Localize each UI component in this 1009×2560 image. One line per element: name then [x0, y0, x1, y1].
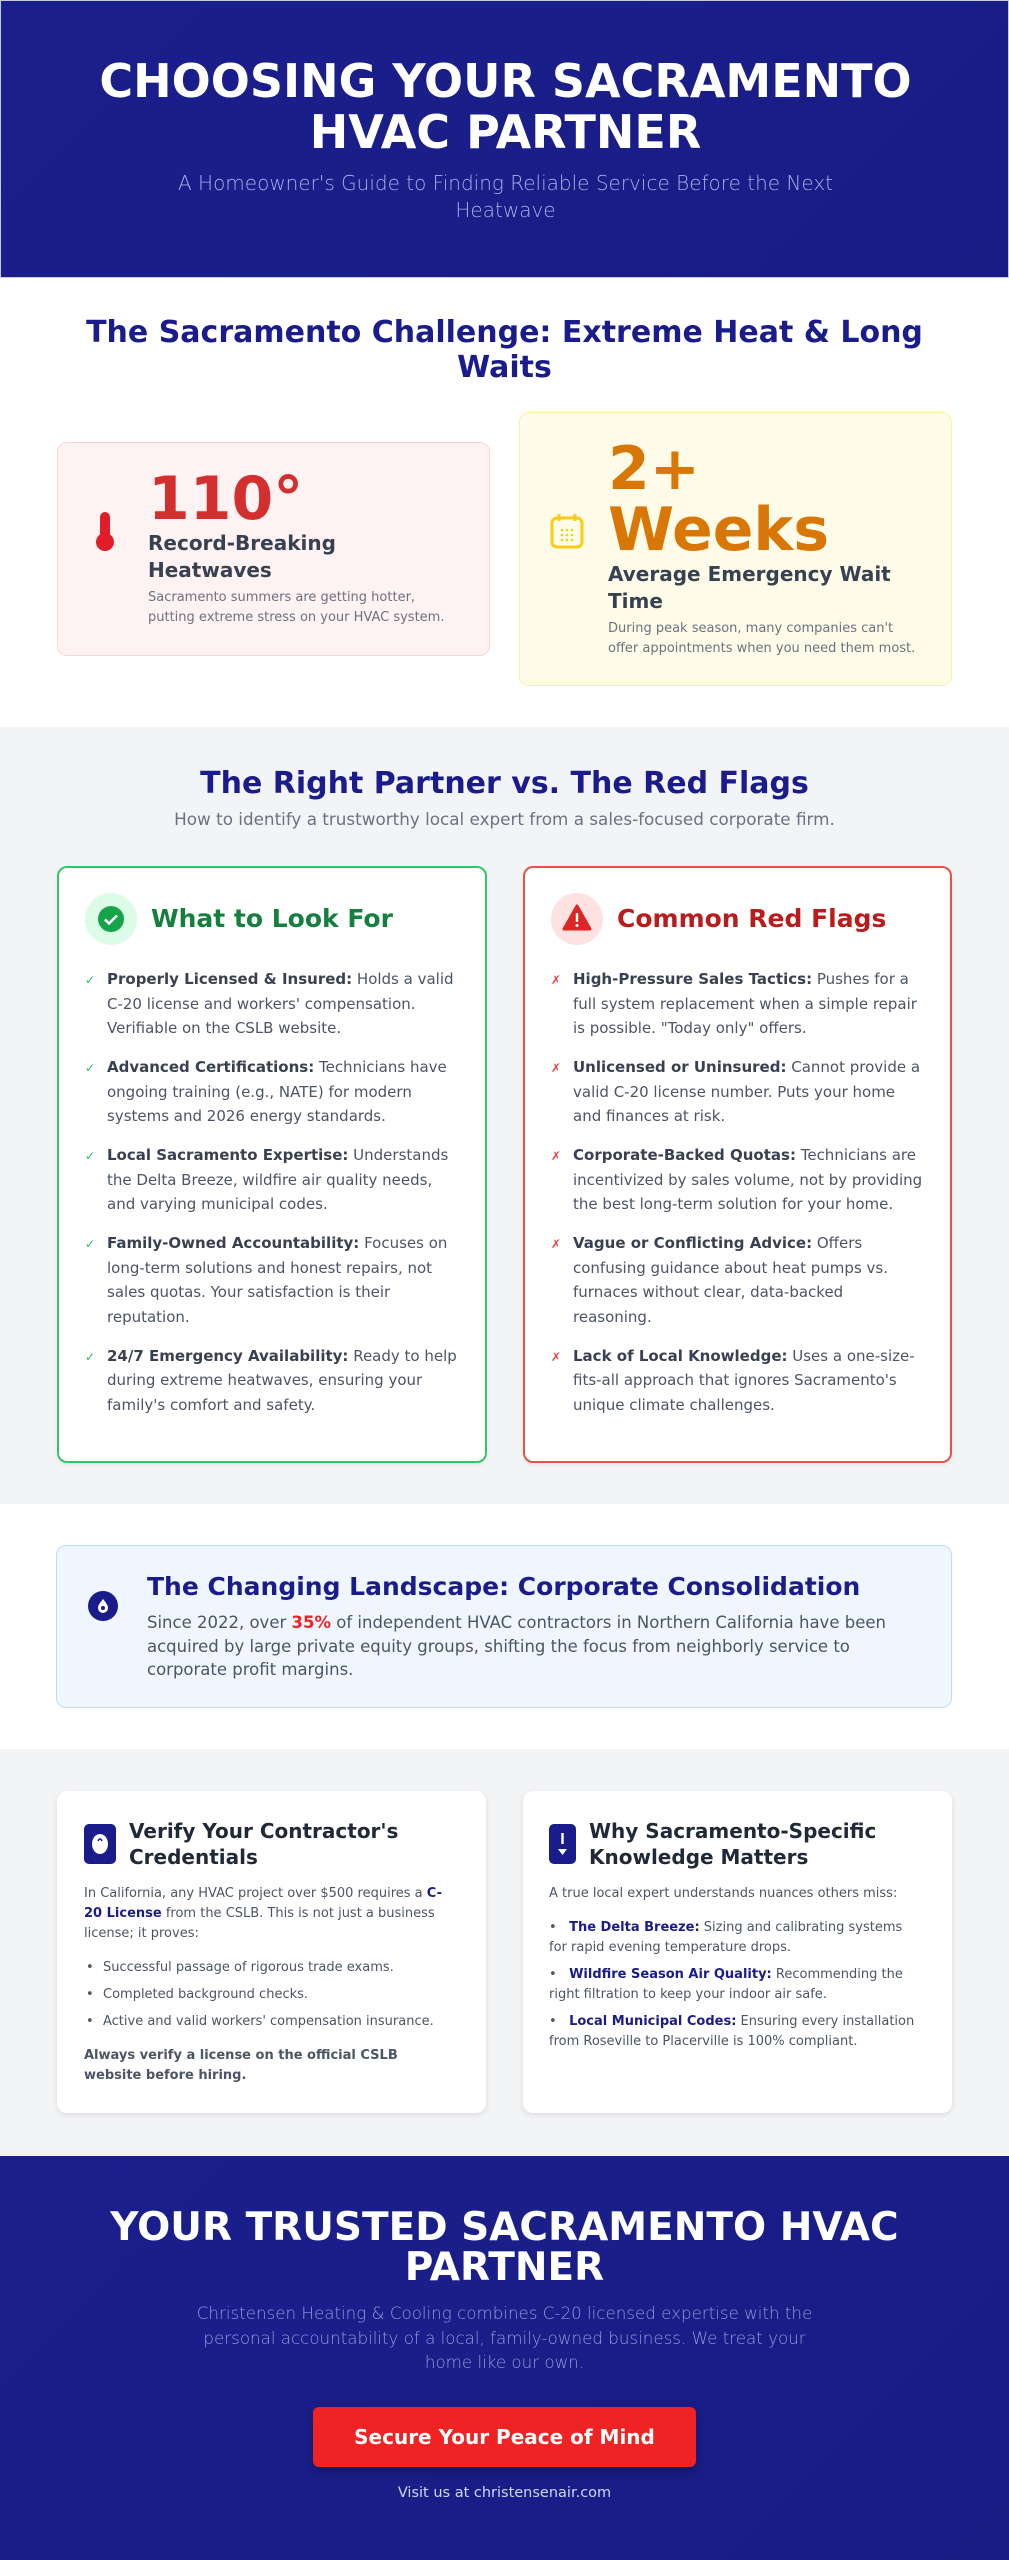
panel body: • The Delta Breeze: Sizing and calibrating systems for rapid evening temperature drops. — [549, 1920, 902, 1955]
heading: Waits — [457, 350, 552, 385]
stat text: 2+ — [608, 434, 700, 504]
list: red flags: ✗ — [551, 1237, 561, 1251]
list: good signs: Advanced Certifications: Technicians have ongoing training (e.g., NATE) for modern systems and 2026 energy standards. — [107, 1058, 447, 1125]
panel body: Active and valid workers' compensation insurance. — [103, 2014, 434, 2029]
list: good signs: Family-Owned Accountability: Focuses on long-term solutions and honest repairs, not sales quotas. Your satisfaction is their reputation. — [107, 1234, 447, 1326]
panel body — [84, 1886, 442, 2083]
title: HVAC PARTNER — [310, 105, 701, 159]
stat text: Weeks — [608, 495, 829, 565]
list: red flags — [551, 970, 922, 1414]
list: red flags: High-Pressure Sales Tactics: Pushes for a full system replacement when a simple repair is possible. "Today only" offers. — [573, 970, 917, 1037]
subtitle: A Homeowner's Guide to Finding Reliable Service Before the Next — [178, 171, 833, 195]
panel heading: Common Red Flags — [617, 904, 886, 933]
subtitle — [178, 171, 833, 222]
panel heading: Why Sacramento-Specific — [589, 1819, 876, 1843]
panel heading: Credentials — [129, 1845, 258, 1869]
list: red flags: Lack of Local Knowledge: Uses a one-size-fits-all approach that ignores Sacramento's unique climate challenges. — [573, 1346, 915, 1414]
stat text — [608, 434, 915, 656]
list: good signs: Properly Licensed & Insured: Holds a valid C-20 license and workers' compensation. Verifiable on the CSLB website. — [107, 970, 454, 1037]
list: red flags: Vague or Conflicting Advice: Offers confusing guidance about heat pumps vs. furnaces without clear, data-backed reasoning. — [573, 1234, 888, 1326]
list: red flags: ✗ — [551, 1149, 561, 1163]
list: red flags: Unlicensed or Uninsured: Cannot provide a valid C-20 license number. Puts your home and finances at risk. — [573, 1058, 920, 1125]
panel body: Successful passage of rigorous trade exams. — [103, 1960, 394, 1975]
section: right partner vs red flags — [0, 727, 1009, 1504]
icon: warning — [551, 893, 603, 945]
icon: badge — [84, 1824, 116, 1864]
panel heading — [589, 1819, 876, 1869]
footer title: PARTNER — [405, 2245, 604, 2290]
panel body: • Wildfire Season Air Quality: Recommending the right filtration to keep your indoor air safe. — [549, 1967, 903, 2002]
button — [313, 2407, 696, 2467]
panel body: A true local expert understands nuances others miss: — [549, 1886, 897, 1901]
panel heading — [129, 1819, 398, 1869]
section: Sacramento challenge — [0, 278, 1009, 727]
list: red flags: ✗ — [551, 1061, 561, 1075]
panel: red flags — [523, 866, 952, 1463]
panel heading: Knowledge Matters — [589, 1845, 808, 1869]
footer title: YOUR TRUSTED SACRAMENTO HVAC — [110, 2205, 899, 2250]
panel heading: What to Look For — [151, 904, 393, 933]
stat text: Average Emergency Wait — [608, 562, 891, 586]
panel body: • — [86, 2014, 94, 2029]
panel: verify credentials — [57, 1791, 486, 2113]
list: red flags: ✗ — [551, 1350, 561, 1364]
panel body: Always verify a license on the official CSLB — [84, 2048, 398, 2063]
website: Visit us at christensenair.com — [398, 2485, 611, 2501]
list: good signs: ✓ — [85, 973, 95, 987]
footer text — [197, 2303, 812, 2372]
stat text: putting extreme stress on your HVAC system. — [148, 610, 444, 625]
stat text: offer appointments when you need them most. — [608, 641, 915, 656]
stat text — [148, 464, 444, 625]
list: good signs — [85, 970, 457, 1414]
header — [0, 0, 1009, 278]
section: knowledge cards — [0, 1749, 1009, 2156]
icon: drop — [88, 1591, 118, 1621]
panel body: • — [86, 1987, 94, 2002]
stat card: 2+ weeks — [519, 412, 952, 686]
callout: corporate consolidation — [56, 1545, 952, 1708]
list: good signs: ✓ — [85, 1061, 95, 1075]
panel body: In California, any HVAC project over $500 requires a C-20 License from the CSLB. This is not just a business license; it proves: — [84, 1886, 442, 1941]
list: good signs: ✓ — [85, 1237, 95, 1251]
footer text: home like our own. — [425, 2352, 584, 2372]
title — [99, 54, 912, 159]
panel body: Completed background checks. — [103, 1987, 308, 2002]
icon: calendar — [550, 514, 584, 548]
panel: what to look for — [57, 866, 487, 1463]
panel heading: Verify Your Contractor's — [129, 1819, 398, 1843]
title: CHOOSING YOUR SACRAMENTO — [99, 54, 912, 108]
heading — [86, 315, 923, 385]
list: red flags: Corporate-Backed Quotas: Technicians are incentivized by sales volume, not by providing the best long-term solution for your home. — [573, 1146, 922, 1213]
stat text: 110° — [148, 464, 303, 534]
panel: local knowledge — [523, 1791, 952, 2113]
stat card: 110 degrees — [57, 442, 490, 656]
footer text: personal accountability of a local, family-owned business. We treat your — [203, 2328, 806, 2348]
stat text: Sacramento summers are getting hotter, — [148, 590, 415, 605]
heading: The Right Partner vs. The Red Flags — [200, 766, 809, 801]
panel body: website before hiring. — [84, 2068, 246, 2083]
heading: The Sacramento Challenge: Extreme Heat & Long — [86, 315, 923, 350]
list: good signs: ✓ — [85, 1149, 95, 1163]
icon: thermometer — [96, 512, 114, 551]
list: red flags: ✗ — [551, 973, 561, 987]
footer title — [110, 2205, 899, 2290]
panel body: • Local Municipal Codes: Ensuring every installation from Roseville to Placerville is 100% compliant. — [549, 2014, 914, 2049]
stat text: Time — [608, 589, 663, 613]
callout text: Since 2022, over 35% of independent HVAC contractors in Northern California have been acquired by large private equity groups, shifting the focus from neighborly service to corporate profit margins. — [147, 1613, 886, 1679]
button: Secure Your Peace of Mind — [354, 2425, 655, 2449]
stat text: During peak season, many companies can't — [608, 621, 893, 636]
list: good signs: Local Sacramento Expertise: Understands the Delta Breeze, wildfire air quality needs, and varying municipal codes. — [107, 1146, 448, 1213]
panel body — [549, 1886, 914, 2049]
footer — [0, 2156, 1009, 2560]
icon: check circle — [85, 893, 137, 945]
stat text: Heatwaves — [148, 558, 272, 582]
subtitle: Heatwave — [455, 198, 556, 222]
icon: alert — [549, 1824, 576, 1864]
footer text: Christensen Heating & Cooling combines C-20 licensed expertise with the — [197, 2303, 812, 2323]
callout heading: The Changing Landscape: Corporate Consolidation — [147, 1572, 860, 1601]
stat text: Record-Breaking — [148, 531, 336, 555]
subheading: How to identify a trustworthy local expert from a sales-focused corporate firm. — [174, 809, 835, 829]
list: good signs: 24/7 Emergency Availability: Ready to help during extreme heatwaves, ensuring your family's comfort and safety. — [107, 1346, 457, 1414]
section: changing landscape — [0, 1504, 1009, 1749]
panel body: • — [86, 1960, 94, 1975]
list: good signs: ✓ — [85, 1350, 95, 1364]
